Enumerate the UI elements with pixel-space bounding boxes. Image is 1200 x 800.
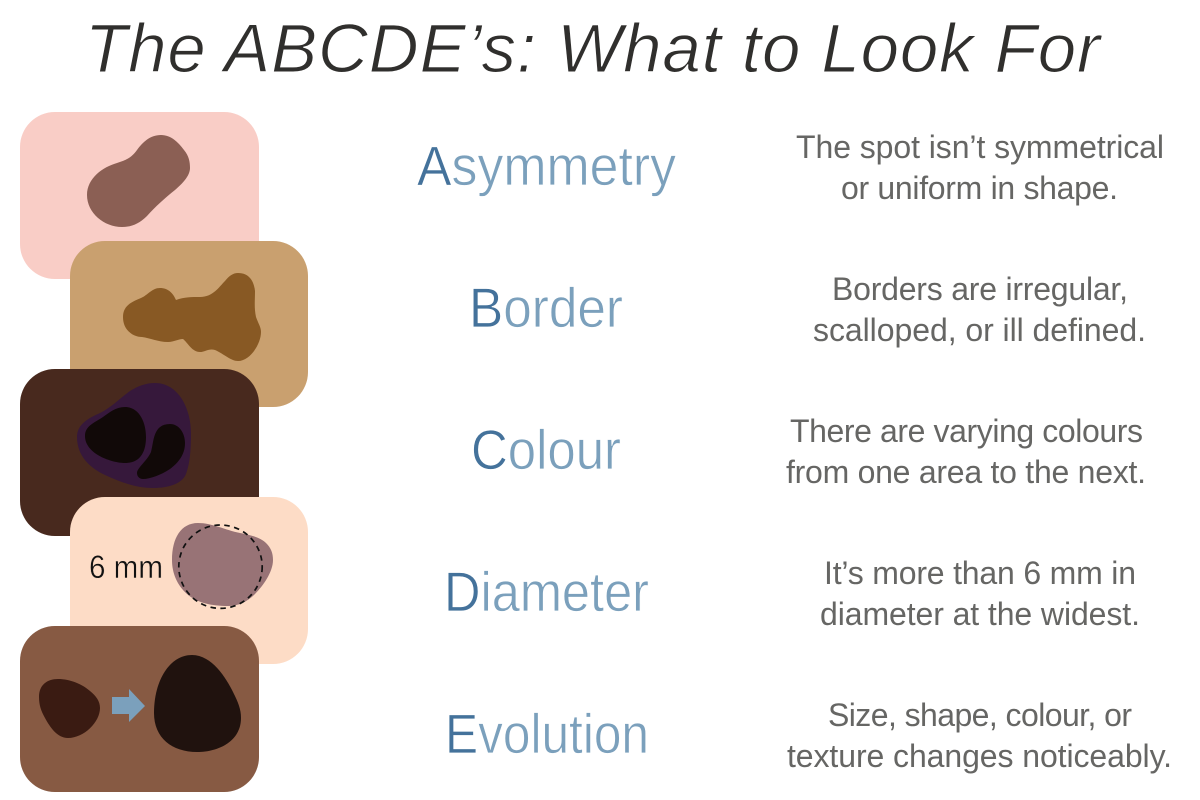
panel: evolution illustration [20,626,259,792]
text: evolution description [787,697,1172,774]
text: border description: scalloped, or ill defined. [813,312,1146,348]
blob: large evolved spot [154,655,241,752]
panel: colour illustration [20,369,259,536]
title: The ABCDE’s: What to Look For [85,10,1103,87]
blob: asymmetrical spot [87,135,190,227]
heading: asymmetry: Asymmetry [417,134,676,197]
blob: black area left [85,407,146,463]
text: border description: Borders are irregular, [832,271,1128,307]
text: diameter description: diameter at the widest. [820,596,1140,632]
blob: purple spot [77,383,191,488]
heading: evolution: Evolution [445,702,649,765]
arrow: change over time [112,689,145,722]
dashed circle: 6 mm guide [179,525,262,608]
text: asymmetry description: The spot isn’t symmetrical [796,129,1164,165]
blob: irregular border spot [123,273,261,361]
blob: black area right [137,424,185,479]
text: diameter description [820,555,1140,632]
text: colour description: from one area to the next. [786,454,1146,490]
panel: diameter illustration [70,497,308,664]
heading: diameter: Diameter [444,560,649,623]
text: asymmetry description: or uniform in shape. [841,170,1118,206]
panel: asymmetry illustration [20,112,259,279]
heading: colour: Colour [471,418,621,481]
text: colour description [786,413,1146,490]
blob: small early spot [39,679,100,738]
text: evolution description: texture changes noticeably. [787,738,1172,774]
text: diameter description: It’s more than 6 mm in [824,555,1136,591]
label: 6 mm: 6 mm [89,549,163,585]
text: colour description: There are varying colours [790,413,1143,449]
panel: border illustration [70,241,308,407]
text: evolution description: Size, shape, colour, or [828,697,1132,733]
heading: border: Border [469,276,623,339]
text: border description [813,271,1146,348]
blob: spot wider than 6 mm [172,523,273,606]
text: asymmetry description [796,129,1164,206]
